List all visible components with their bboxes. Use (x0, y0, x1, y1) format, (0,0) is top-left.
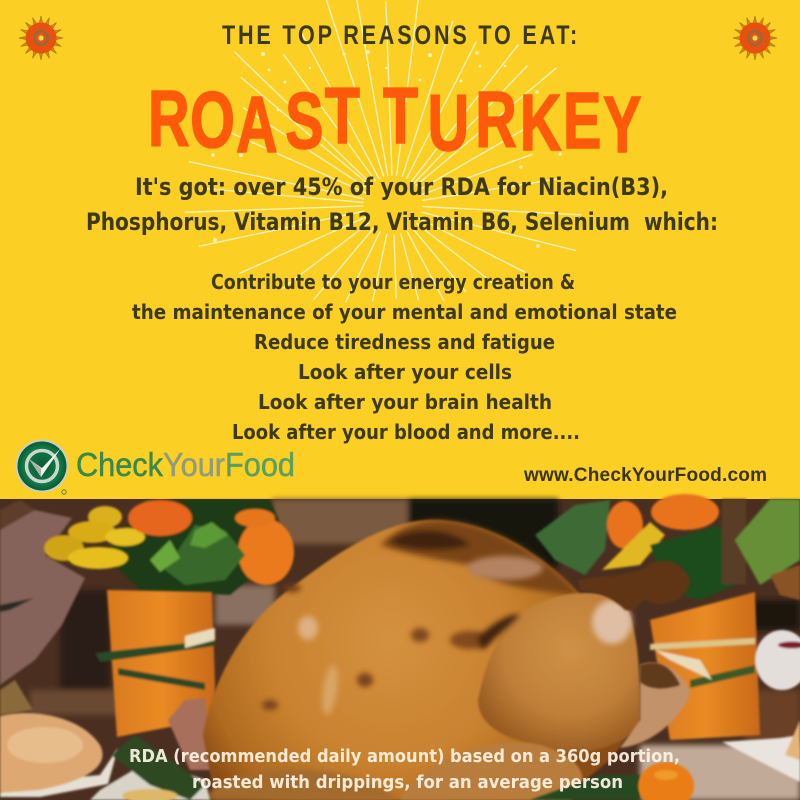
turkey highlights and char spots (262, 556, 543, 716)
benefits text block: Look after your brain health (258, 390, 552, 414)
turkey main body (203, 520, 639, 800)
gravy boat bowl (755, 630, 800, 690)
bread loaf and plate (0, 713, 118, 797)
mandala icon: top left (19, 16, 63, 60)
photo background details (30, 499, 800, 800)
right flower bouquet (535, 494, 800, 600)
sparkle dots (211, 50, 562, 248)
logo wordmark: CheckYourFood (76, 446, 295, 483)
turkey lower wing (168, 698, 215, 770)
benefits text block: Contribute to your energy creation & (211, 270, 575, 294)
benefits text block: Look after your blood and more.... (232, 420, 580, 444)
footnote caption over the photo (129, 746, 680, 793)
left flower bouquet (44, 500, 294, 595)
turkey thigh (478, 593, 640, 752)
turkey browned top skin (380, 520, 580, 596)
turkey (168, 520, 690, 800)
turkey leg tip (578, 561, 690, 610)
icon: check badge (16, 440, 68, 494)
footnote caption over the photo: RDA (recommended daily amount) based on a 360g portion, (129, 746, 680, 767)
turkey foreground wing (400, 743, 582, 800)
thigh shadow (478, 615, 520, 650)
right white plate (722, 720, 800, 782)
title: roast turkey: ROAST TURKEY (148, 71, 641, 169)
benefits text block: the maintenance of your mental and emotional state (132, 300, 677, 324)
benefits text block: Reduce tiredness and fatigue (254, 330, 555, 354)
logo: CheckYourFood (16, 440, 295, 494)
yellow background panel (0, 0, 800, 500)
turkey thigh highlight (592, 600, 632, 644)
photo: roast turkey on a festive table (0, 494, 800, 800)
heading: the top reasons to eat: THE TOP REASONS TO EAT: (222, 21, 577, 51)
small pumpkin (638, 762, 694, 800)
autumn leaves (0, 500, 85, 715)
turkey drumstick (620, 663, 690, 748)
right orange vase (650, 592, 760, 740)
left orange vase (95, 590, 216, 737)
mandala icon: top right (733, 16, 777, 60)
starburst rays behind the title (185, 0, 581, 302)
website url: www.CheckYourFood.com (523, 465, 767, 486)
benefits text block: Look after your cells (298, 360, 512, 384)
intro text block: It's got: over 45% of your RDA for Niacin(B3), (135, 173, 668, 201)
benefits text block (132, 270, 677, 444)
footnote caption over the photo: roasted with drippings, for an average person (192, 772, 623, 793)
intro text block (86, 173, 718, 236)
herbs and garnish (90, 735, 640, 800)
